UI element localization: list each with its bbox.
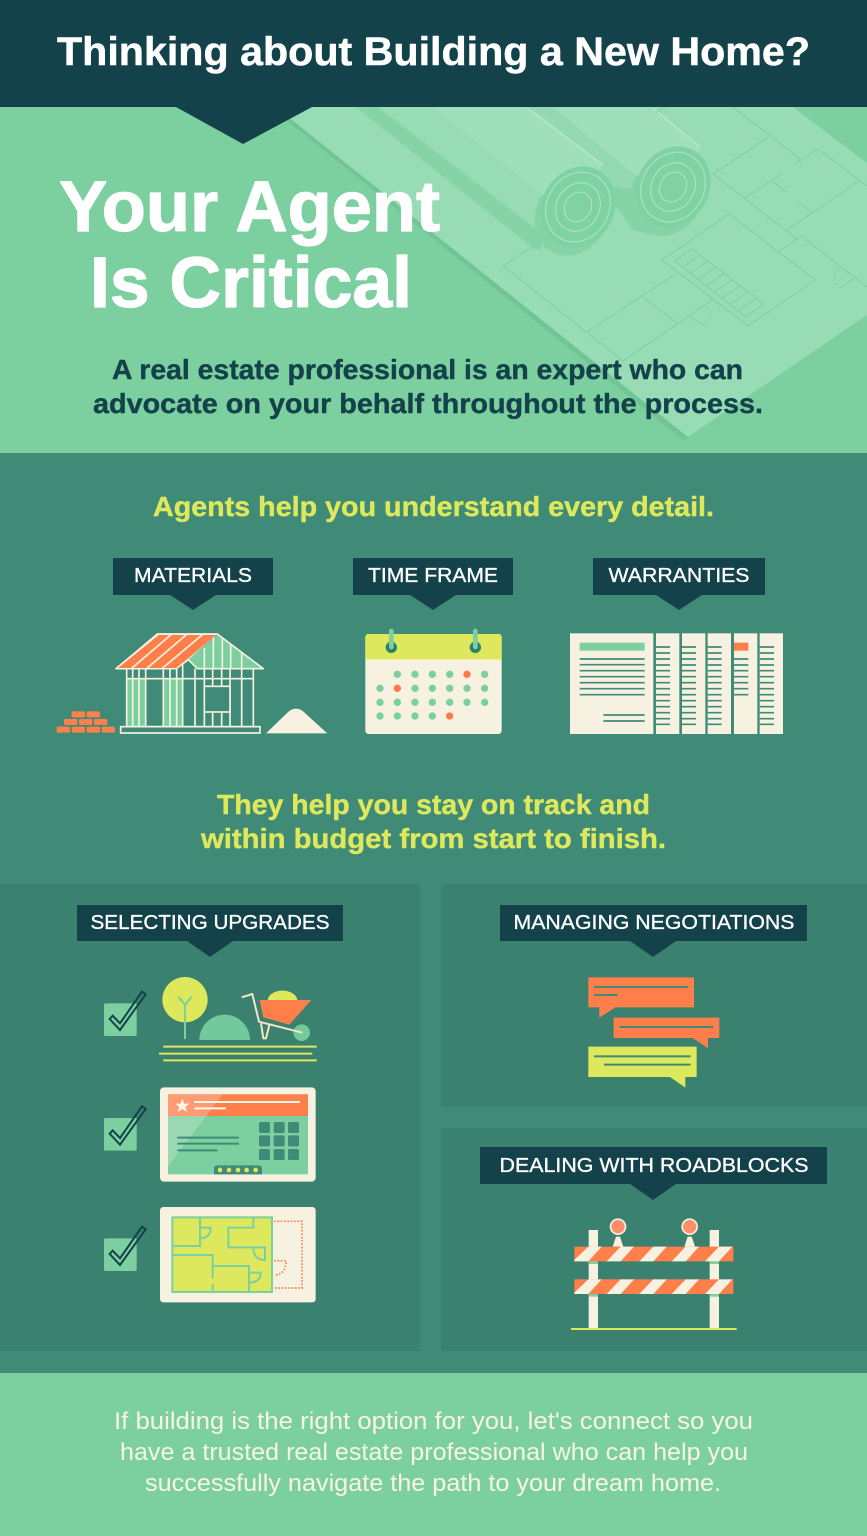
- panel: closing call to action: have a trusted real estate professional who can help you: [120, 1439, 748, 1466]
- panel: closing call to action: If building is the right option for you, let's connect so you: [114, 1408, 753, 1435]
- panel: closing call to action: successfully navigate the path to your dream home.: [145, 1470, 721, 1497]
- heading: your agent is critical: [59, 168, 440, 323]
- panel: managing negotiations: [441, 884, 867, 1107]
- intro text: advocate on your behalf throughout the process.: [93, 388, 763, 419]
- label: materials: MATERIALS: [134, 565, 252, 587]
- subheading: on track and within budget: [200, 789, 666, 854]
- heading: your agent is critical: Your Agent: [59, 168, 440, 247]
- label: selecting upgrades: [77, 905, 343, 957]
- label: dealing with roadblocks: DEALING WITH ROADBLOCKS: [500, 1155, 808, 1177]
- icon: floor plan: [160, 1207, 316, 1302]
- icon: bricks and sand: [57, 709, 327, 733]
- title: Thinking about Building a New Home?: [57, 30, 810, 74]
- heading: your agent is critical: Is Critical: [90, 244, 412, 323]
- panel: dealing with roadblocks: [441, 1128, 867, 1351]
- label: time frame: [353, 558, 513, 610]
- icon: warranty documents: [570, 633, 783, 734]
- icon: road barricade: [571, 1218, 737, 1329]
- label: selecting upgrades: SELECTING UPGRADES: [90, 912, 330, 934]
- label: warranties: WARRANTIES: [608, 565, 750, 587]
- upgrade icons: [104, 977, 317, 1302]
- panel: closing call to action: [0, 1373, 867, 1536]
- label: materials: [113, 558, 273, 610]
- illustration: rolled blueprints: [270, 107, 867, 441]
- label: managing negotiations: [500, 905, 807, 957]
- icon: checkbox one: [104, 992, 146, 1036]
- panel: selecting upgrades: [0, 884, 420, 1351]
- subheading: understand every detail: Agents help you understand every detail.: [153, 491, 714, 522]
- icon: checkbox three: [104, 1227, 146, 1271]
- icon: calendar: [365, 629, 502, 734]
- subheading: on track and within budget: They help you stay on track and: [217, 789, 650, 820]
- intro text: A real estate professional is an expert who can: [112, 354, 743, 385]
- intro text: [93, 354, 763, 419]
- label: warranties: [593, 558, 765, 610]
- label: managing negotiations: MANAGING NEGOTIATIONS: [514, 912, 794, 934]
- icon: house frame: [116, 634, 263, 733]
- label: dealing with roadblocks: [480, 1147, 827, 1200]
- header banner: [0, 0, 867, 144]
- icon: landscaping with tree and wheelbarrow: [159, 977, 317, 1060]
- icon: checkbox two: [104, 1106, 146, 1151]
- panel: hero: [0, 107, 867, 453]
- subheading: on track and within budget: within budget from start to finish.: [200, 823, 666, 854]
- icon: design center tablet: [160, 1087, 316, 1182]
- icon: speech bubbles: [588, 977, 719, 1088]
- label: time frame: TIME FRAME: [368, 565, 498, 587]
